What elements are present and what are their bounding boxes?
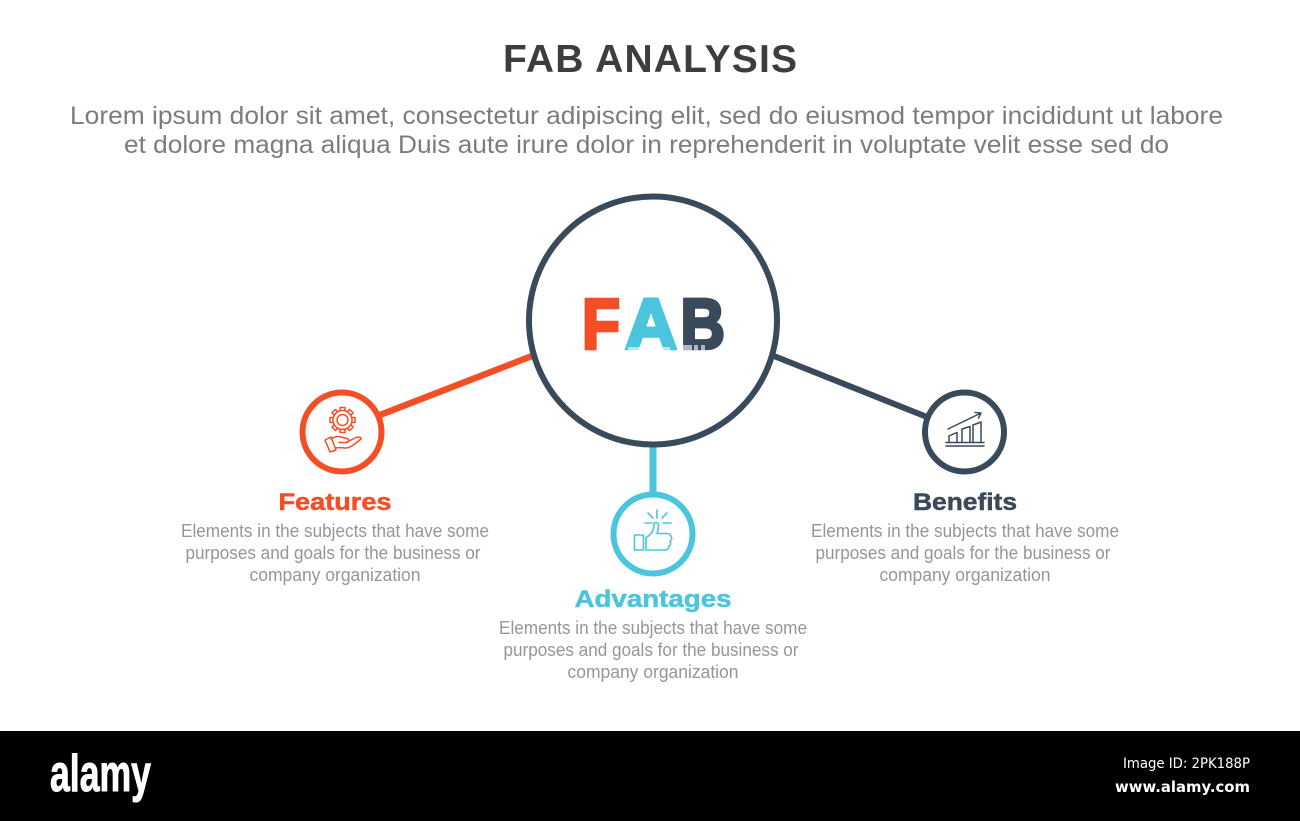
title: FAB ANALYSIS <box>503 38 797 81</box>
central FAB letters: B <box>680 286 725 364</box>
connector: features <box>380 356 532 415</box>
text block: benefits <box>811 521 1119 585</box>
footer logo: alamy <box>50 745 151 803</box>
text block: advantages: purposes and goals for the business or <box>504 640 798 660</box>
text block: advantages: company organization <box>568 662 738 682</box>
heading: features: Features <box>278 489 392 516</box>
central FAB letters <box>582 286 725 364</box>
subtitle text <box>70 102 1223 159</box>
footer image id: Image ID: 2PK188P <box>1123 756 1250 772</box>
text block: benefits: Elements in the subjects that have some <box>811 521 1119 541</box>
central circle <box>529 196 777 444</box>
node: advantages <box>614 494 692 574</box>
text block: benefits: company organization <box>880 565 1050 585</box>
subtitle text: et dolore magna aliqua Duis aute irure dolor in reprehenderit in voluptate velit esse sed do <box>124 131 1169 159</box>
footer bar <box>0 731 1300 821</box>
node: benefits <box>925 392 1004 472</box>
icon: growth chart <box>946 412 984 446</box>
text block: advantages: Elements in the subjects that have some <box>499 618 807 638</box>
text block: features: purposes and goals for the business or <box>186 543 480 563</box>
connector: advantages <box>650 445 656 495</box>
text block: features: company organization <box>250 565 420 585</box>
text block: advantages <box>499 618 807 682</box>
connector: benefits <box>774 356 927 417</box>
central FAB letters: F <box>582 286 620 364</box>
node: features <box>302 392 382 472</box>
icon: gear and hand <box>325 408 361 452</box>
text block: features <box>181 521 489 585</box>
text block: features: Elements in the subjects that have some <box>181 521 489 541</box>
subtitle text: Lorem ipsum dolor sit amet, consectetur adipiscing elit, sed do eiusmod tempor incididunt ut labore <box>70 102 1223 130</box>
heading: advantages: Advantages <box>574 586 732 613</box>
heading: benefits: Benefits <box>913 489 1017 516</box>
footer url: www.alamy.com <box>1115 778 1250 796</box>
watermark specks on letters <box>628 345 705 351</box>
icon: thumbs up <box>634 510 672 550</box>
central FAB letters: A <box>625 286 677 364</box>
text block: benefits: purposes and goals for the business or <box>816 543 1110 563</box>
